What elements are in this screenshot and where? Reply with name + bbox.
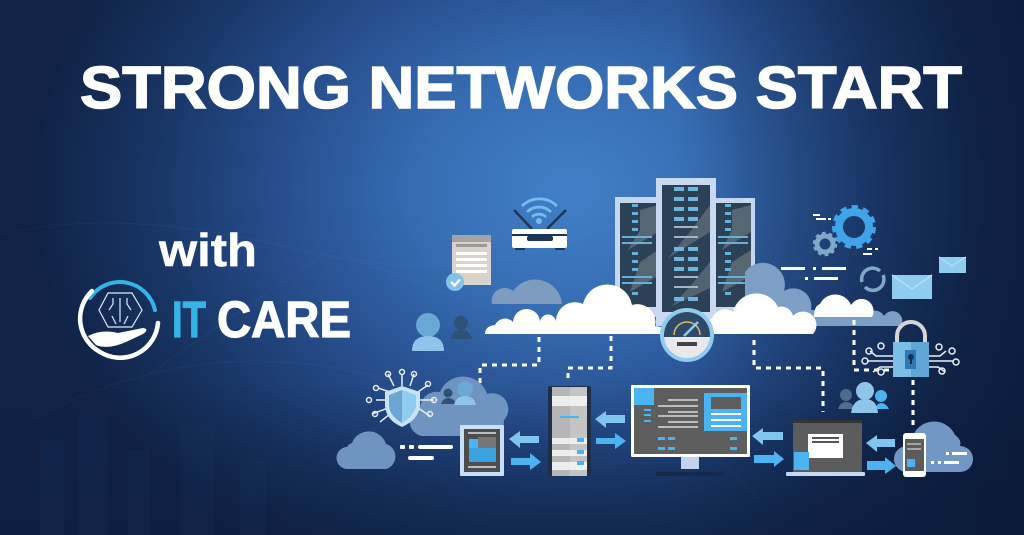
dotted connectors xyxy=(480,320,913,430)
cloud: small white right xyxy=(814,294,874,317)
logo wordmark: CARE xyxy=(217,291,351,348)
dashes on bottom-right cloud xyxy=(931,452,967,464)
cloud: main white right xyxy=(690,293,816,334)
icon: speed dial xyxy=(660,308,714,362)
cloud: back right blue xyxy=(745,263,902,326)
icon: sync xyxy=(862,268,884,290)
cloud: bottom left xyxy=(336,431,395,469)
cloud: main white left xyxy=(485,284,700,334)
arrow: server left xyxy=(595,411,625,428)
icon: document with check xyxy=(446,235,491,291)
icon: shield with circuits xyxy=(366,370,436,427)
icon: large gear xyxy=(835,208,873,246)
arrow: monitor right xyxy=(754,451,784,467)
icon: wifi router xyxy=(512,199,567,250)
device: laptop xyxy=(786,420,865,476)
arrow: phone right xyxy=(867,457,896,474)
arrow: tablet left xyxy=(509,431,539,448)
cloud: bottom right xyxy=(894,422,973,472)
arrow: phone left xyxy=(866,435,895,452)
device: tablet xyxy=(460,425,504,476)
dashes beside bottom-left cloud xyxy=(400,445,453,460)
device: desktop monitor xyxy=(631,385,750,476)
logo: IT Care xyxy=(80,282,351,358)
server rack: centre xyxy=(656,178,716,326)
server rack: right xyxy=(713,198,755,318)
icon: padlock with circuits xyxy=(862,322,959,377)
title: STRONG NETWORKS START xyxy=(80,55,962,121)
server rack: left xyxy=(615,197,659,317)
arrow: tablet right xyxy=(511,453,541,470)
device: server tower xyxy=(548,386,591,476)
cloud: behind shield xyxy=(410,376,508,436)
arrow: monitor left xyxy=(752,428,783,445)
network diagram xyxy=(336,178,973,477)
device: phone xyxy=(903,433,926,477)
logo circuit icon xyxy=(99,293,142,327)
icon: users in cloud xyxy=(441,381,476,405)
icon: envelope small xyxy=(939,257,966,273)
text: with: with xyxy=(158,224,257,276)
icon: envelope large xyxy=(892,275,932,299)
cloud: grey blue behind xyxy=(492,279,562,304)
dashes near gears and clouds xyxy=(781,214,878,280)
icon: users above laptop xyxy=(838,382,889,413)
logo ring xyxy=(80,282,158,358)
icon: small gear xyxy=(814,234,836,254)
logo wordmark: IT xyxy=(172,291,206,348)
icon: users xyxy=(412,313,472,351)
logo hand xyxy=(88,328,146,347)
arrow: server right xyxy=(596,433,626,449)
